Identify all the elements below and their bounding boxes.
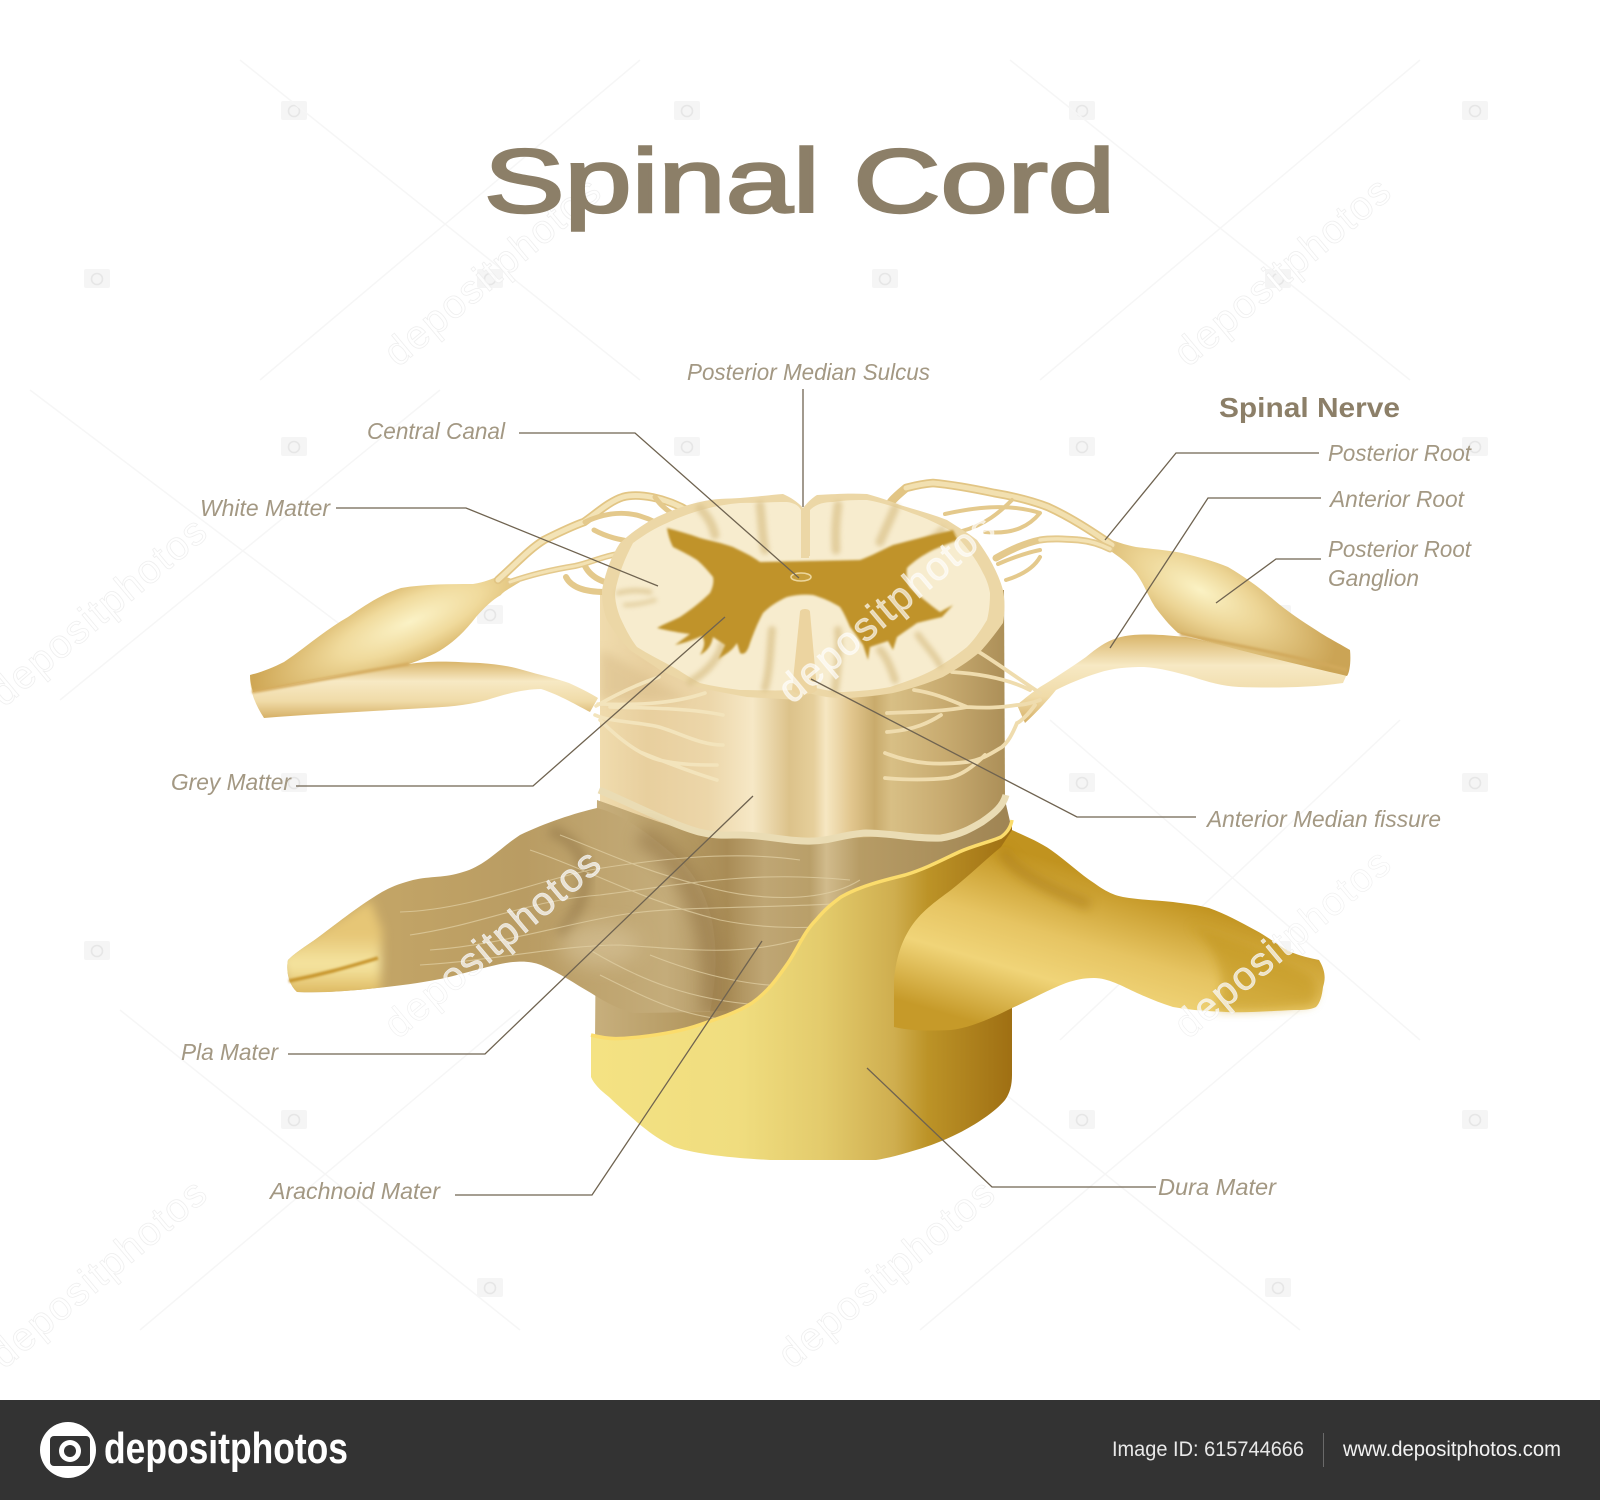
heading: spinal nerve: Spinal Nerve [1219, 392, 1400, 423]
arachnoid layer below band [595, 800, 1012, 1040]
labels [171, 359, 1473, 1204]
labels: Posterior Median Sulcus [687, 359, 930, 385]
leader lines [288, 389, 1321, 1195]
labels: Dura Mater [1158, 1174, 1277, 1200]
posterior septum [801, 510, 809, 558]
watermark text: depositphotos [376, 169, 609, 375]
image id: Image ID: 615744666 [1112, 1438, 1304, 1461]
anterior root, left [250, 662, 598, 718]
watermark text: depositphotos [1166, 169, 1399, 375]
logo wordmark: depositphotos [104, 1424, 348, 1473]
labels: Posterior Root [1328, 440, 1473, 466]
faint watermark camera marks [84, 101, 1488, 1297]
sleeve distal shading [1190, 925, 1317, 1011]
rim [602, 494, 1004, 700]
labels: Pla Mater [181, 1039, 279, 1065]
posterior rootlets, left [498, 496, 690, 592]
right center crease [1180, 634, 1347, 670]
website: www.depositphotos.com [1342, 1438, 1561, 1461]
posterior rootlets, right [891, 483, 1112, 580]
labels: Ganglion [1328, 565, 1419, 591]
right dural nerve sleeve [894, 830, 1325, 1031]
labels: Arachnoid Mater [268, 1178, 441, 1204]
white matter [615, 500, 990, 692]
labels: Anterior Median fissure [1205, 806, 1441, 832]
labels: Central Canal [367, 418, 506, 444]
watermark text: depositphotos [770, 506, 1003, 712]
center crease [252, 664, 409, 692]
dura cut edge [591, 820, 1012, 1039]
right ganglion body [1105, 538, 1350, 676]
watermark text: depositphotos [376, 841, 609, 1047]
grey matter [657, 528, 958, 660]
left sheathed nerve [280, 808, 900, 1020]
pia mater band [599, 790, 1006, 841]
posterior root ganglion, left [250, 575, 520, 692]
sheath tip highlight [287, 900, 386, 992]
column side shadow [600, 653, 674, 700]
sleeve ridge shadow [1002, 850, 1090, 905]
dura mater [591, 820, 1012, 1160]
watermark text [0, 169, 1399, 1377]
spinal column (pia mater surface) [600, 590, 1005, 850]
watermark text: depositphotos [770, 1171, 1003, 1377]
labels: Anterior Root [1328, 486, 1466, 512]
white matter folds [618, 505, 942, 690]
sheath arc shadow [640, 835, 713, 1015]
faint watermark diagonals [30, 60, 1420, 1330]
footer bar [0, 1400, 1600, 1500]
anterior median fissure [792, 609, 817, 694]
labels: White Matter [200, 495, 331, 521]
labels: Posterior Root [1328, 536, 1473, 562]
cross section [602, 494, 1004, 700]
watermark text: depositphotos [1166, 841, 1399, 1047]
labels: Grey Matter [171, 769, 292, 795]
title: Spinal Cord [484, 132, 1115, 232]
logo icon [40, 1422, 96, 1478]
fibres on sheath [400, 835, 900, 1020]
tip center crease [289, 958, 378, 981]
central canal [791, 573, 811, 581]
anterior rootlets on column [595, 652, 1040, 780]
anterior root and ganglion, right [1017, 538, 1350, 723]
